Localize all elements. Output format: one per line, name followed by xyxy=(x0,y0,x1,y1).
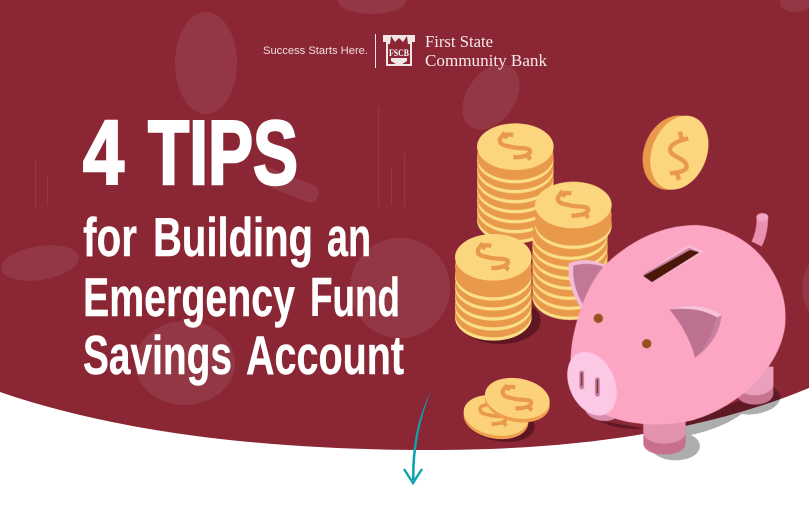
pig left ear xyxy=(568,260,606,309)
subtitle xyxy=(83,206,404,386)
subtitle: Account xyxy=(246,324,404,386)
pig shadow xyxy=(597,387,781,460)
title: 4 xyxy=(83,103,124,204)
coin stack: back xyxy=(477,123,554,243)
piggy bank xyxy=(558,213,786,460)
title: TIPS xyxy=(148,103,298,204)
pig legs xyxy=(585,367,773,455)
title xyxy=(83,103,298,204)
subtitle: Emergency xyxy=(83,266,295,328)
arrow xyxy=(404,391,431,483)
subtitle: Savings xyxy=(83,324,232,386)
subtitle: Building xyxy=(153,206,313,268)
logo: tagline: Success Starts Here. xyxy=(263,45,368,57)
subtitle: Fund xyxy=(310,266,400,328)
logo: bank name xyxy=(425,32,548,70)
subtitle: for xyxy=(83,206,137,268)
coin: floating xyxy=(632,106,719,199)
coin stack: front xyxy=(455,234,541,344)
pig snout xyxy=(558,344,626,423)
logo: bank shield: FSCB xyxy=(389,48,409,58)
logo: bank shield xyxy=(383,35,415,66)
pig eyes xyxy=(594,314,651,348)
coins: small pile xyxy=(460,373,553,447)
subtitle: an xyxy=(327,206,371,268)
logo: bank name: Community Bank xyxy=(425,51,548,70)
logo: bank name: First State xyxy=(425,32,493,51)
pig body xyxy=(571,225,786,424)
pig slot xyxy=(641,245,704,282)
coin stack: middle xyxy=(532,182,612,320)
pig right ear xyxy=(669,306,722,358)
pig tail xyxy=(756,213,768,244)
